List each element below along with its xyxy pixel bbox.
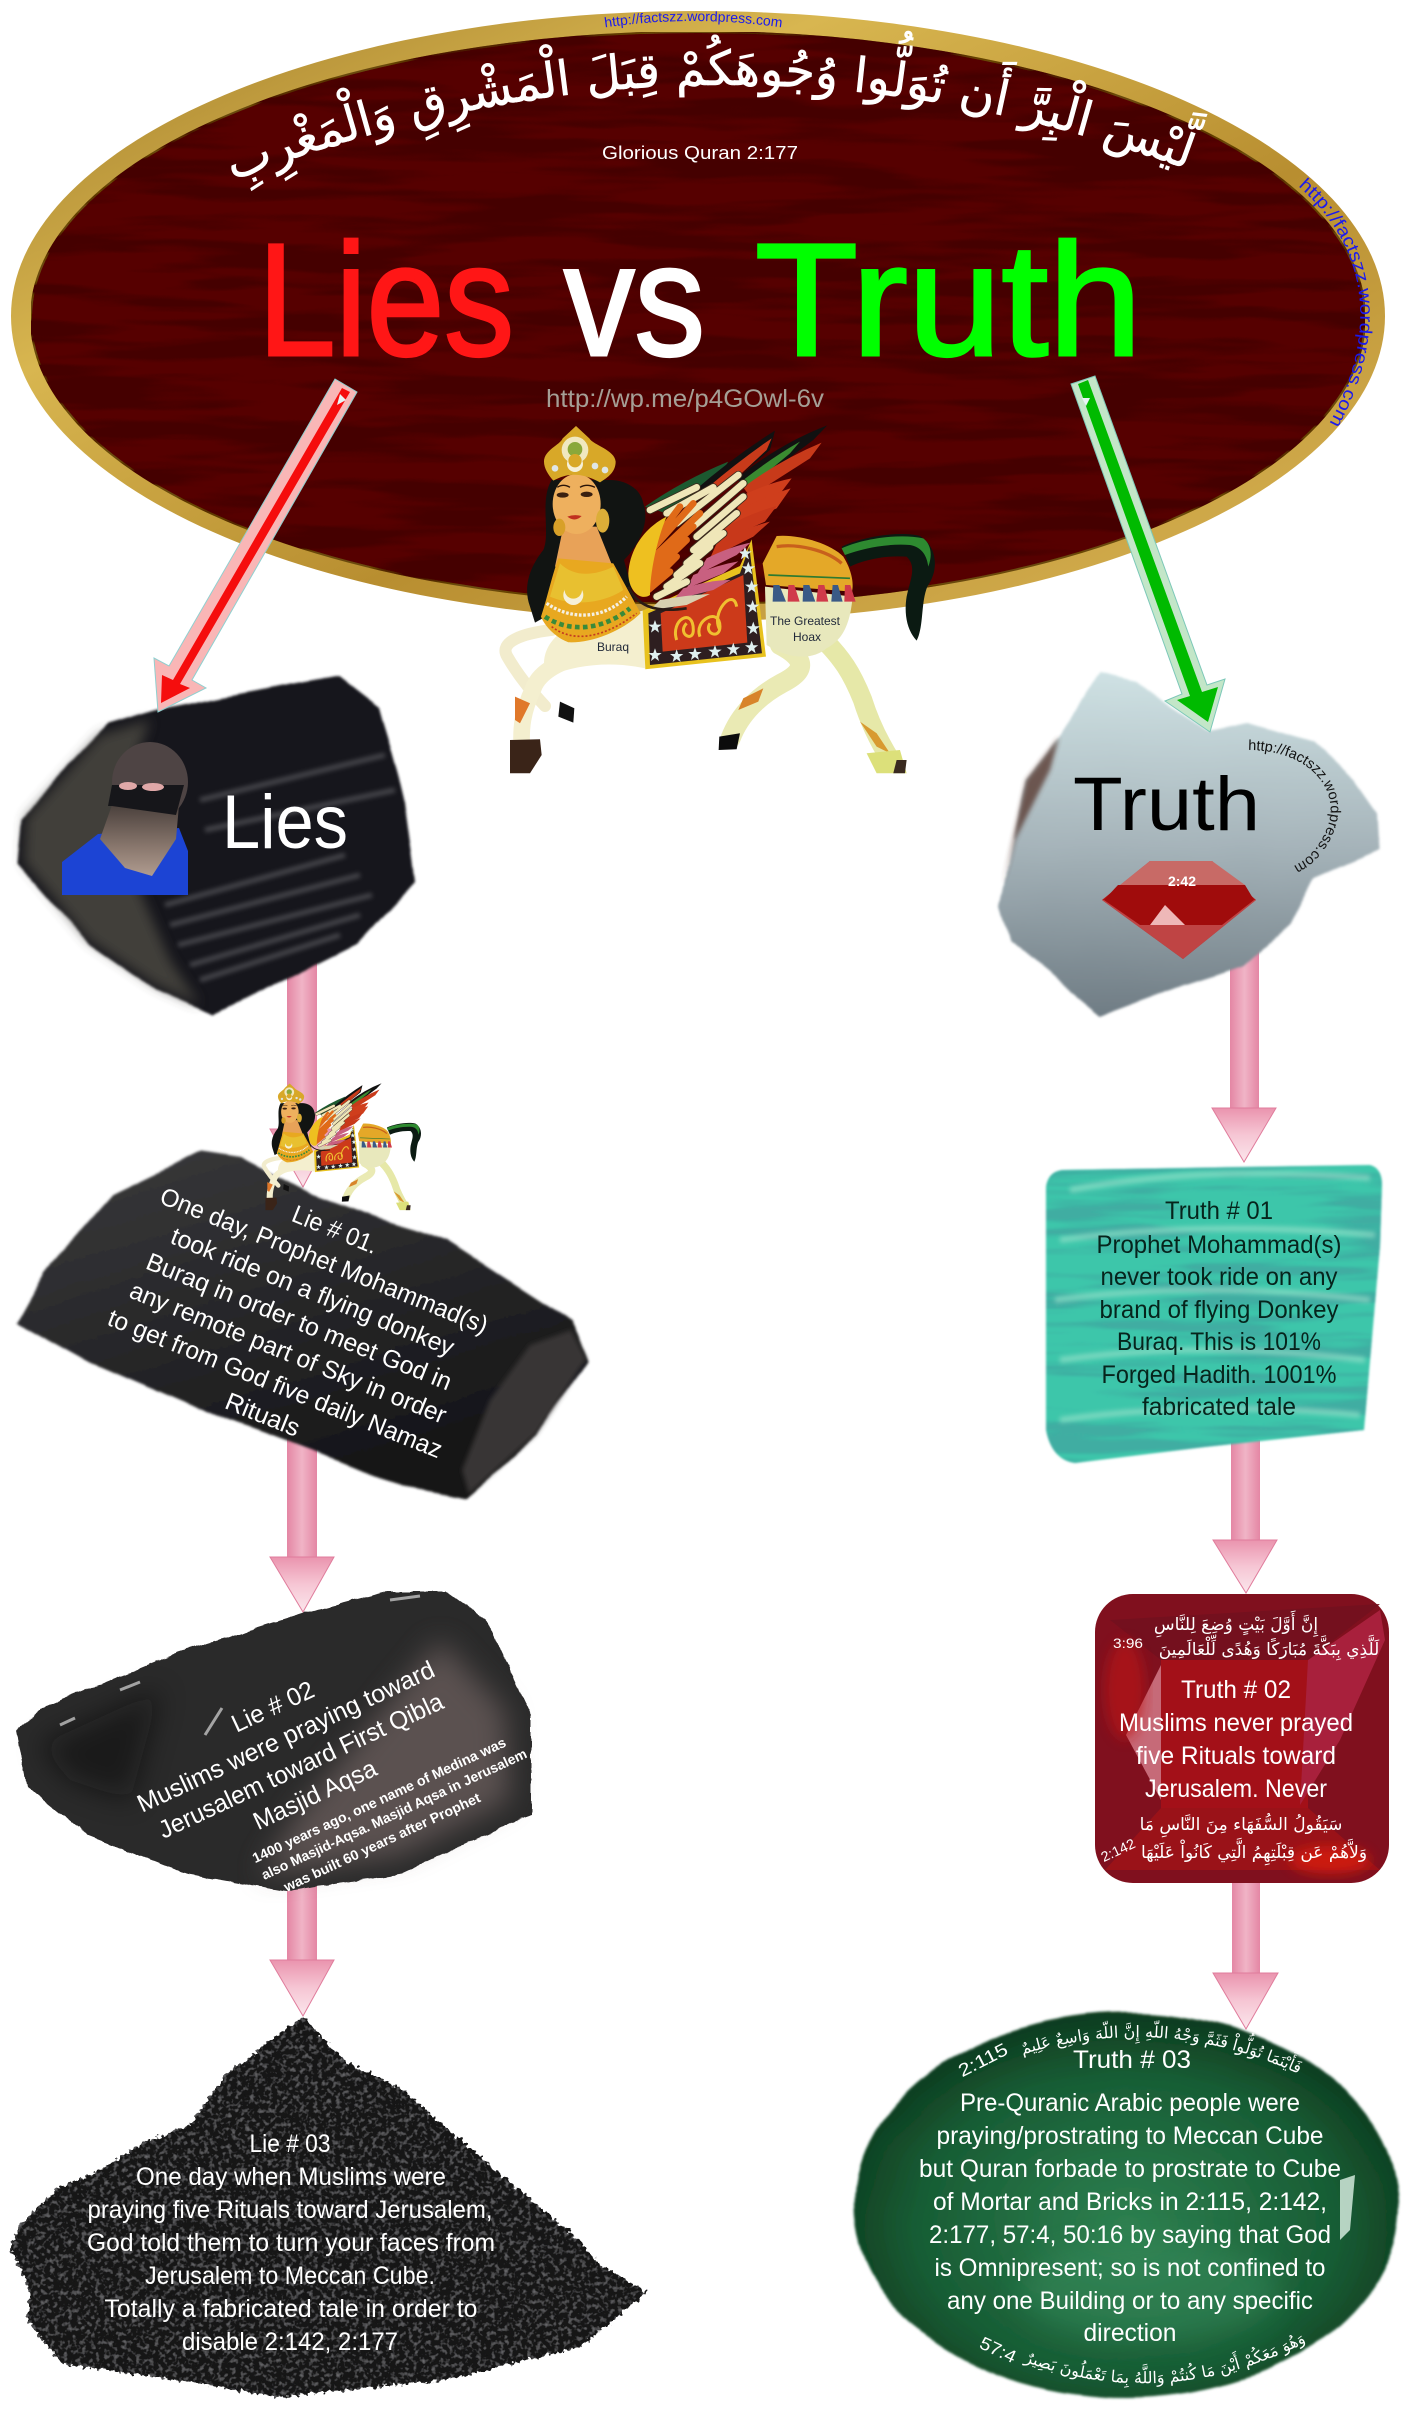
text: lie 01: Buraq in order to meet God in [142, 1248, 456, 1396]
highlight on emerald [1340, 2175, 1355, 2240]
text: truth 01 [1096, 1197, 1342, 1421]
text: truth 03: praying/prostrating to Meccan Cube [936, 2122, 1324, 2150]
stone: pale grey agate [1000, 674, 1379, 1016]
text: truth 01: Buraq. This is 101% [1117, 1328, 1321, 1356]
text: Arabic 2:142: وَلاَّهُمْ عَن قِبْلَتِهِمُ الَّتِي كَانُواْ عَلَيْهَا [1141, 1837, 1367, 1866]
text: lie 03: disable 2:142, 2:177 [182, 2328, 398, 2356]
title: Truth: Truth [755, 210, 1142, 389]
text: truth 01: Truth # 01 [1165, 1197, 1273, 1225]
Arabic verse: لَّيْسَ الْبِرَّ أَن تُوَلُّوا وُجُوهَكُمْ قِبَلَ الْمَشْرِقِ وَالْمَغْرِبِ [231, 30, 1208, 192]
text: Arabic 2:142: سَيَقُولُ السُّفَهَاء مِنَ النَّاسِ مَا [1140, 1812, 1342, 1838]
stone: coal powder pile [10, 2017, 647, 2397]
text: lie 02: also Masjid-Aqsa. Masjid Aqsa in Jerusalem [259, 1745, 529, 1883]
text: truth 03: 2:177, 57:4, 50:16 by saying that God [929, 2221, 1331, 2249]
icon: ruby gem: 2:42 [1168, 873, 1196, 889]
panel: Truth 03 [852, 2009, 1401, 2400]
stone: black tourmaline [18, 676, 415, 1014]
text: truth 03: direction [1084, 2319, 1176, 2347]
icon: ruby gem [1102, 861, 1256, 959]
panel: Lie 01 [16, 1152, 588, 1497]
panel: title oval [11, 11, 1385, 620]
arrow: pink truth connector 2 [1213, 1440, 1277, 1593]
text: lie 03: Lie # 03 [250, 2130, 330, 2158]
text: truth 03: Truth # 03 [1073, 2046, 1191, 2074]
verse ref 57:4: 57:4 [977, 2333, 1019, 2367]
verse ref 2:115: 2:115 [955, 2039, 1011, 2081]
text: Arabic 2:142 [1098, 1812, 1367, 1866]
title: Lies: Lies [258, 210, 514, 389]
Arabic arc top: فَأَيْنَمَا تُوَلُّواْ فَثَمَّ وَجْهُ اللّهِ إِنَّ اللّهَ وَاسِعٌ عَلِيمٌ [1022, 2020, 1302, 2072]
text: lie 03: praying five Rituals toward Jerusalem, [88, 2196, 492, 2224]
text: truth 01: brand of flying Donkey [1100, 1296, 1339, 1324]
url curved top: http://factszz.wordpress.com [604, 11, 782, 28]
gold oval frame [11, 11, 1385, 621]
text: lie 03: One day when Muslims were [136, 2163, 446, 2191]
text: lie 03 [87, 2130, 495, 2356]
rough grey flank [24, 720, 200, 1005]
winged figure art [505, 425, 935, 773]
panel: Lie 02 [16, 1591, 531, 1895]
text: truth 02: five Rituals toward [1136, 1742, 1336, 1770]
text: truth 03: but Quran forbade to prostrate to Cube [919, 2155, 1341, 2183]
text: lie 03: Totally a fabricated tale in order to [104, 2295, 478, 2323]
text: lie 02 [133, 1656, 529, 1895]
mottled light patch [1020, 2240, 1280, 2340]
stone: obsidian shard [16, 1591, 531, 1891]
arrow: pink lies connector 3 [270, 1860, 334, 2016]
text: truth 02 [1119, 1676, 1353, 1803]
crystal streaks [165, 755, 395, 980]
label: Buraq: Buraq [597, 640, 629, 654]
text: lie 01: Rituals [221, 1387, 304, 1443]
verse reference: Glorious Quran 2:177 [602, 143, 798, 163]
text: truth 03: is Omnipresent; so is not confined to [934, 2254, 1326, 2282]
text: truth 01: Forged Hadith. 1001% [1102, 1361, 1336, 1389]
text: Arabic 3:96: 3:96 [1113, 1635, 1143, 1651]
text: truth 02: Jerusalem. Never [1145, 1775, 1327, 1803]
text: truth 03 [919, 2046, 1341, 2347]
text: truth 01: Prophet Mohammad(s) [1096, 1231, 1342, 1259]
bright specks [60, 1596, 420, 1735]
arrow: pink truth connector 3 [1213, 1870, 1278, 2029]
amazonite pale streaks [1055, 1174, 1375, 1420]
label: The Greatest Hoax [770, 614, 841, 644]
arrow: red to Lies [154, 379, 357, 712]
text: truth 02: Truth # 02 [1181, 1676, 1291, 1704]
text: lie 02: Lie # 02 [227, 1676, 319, 1738]
short url: http://wp.me/p4GOwl-6v [546, 385, 825, 413]
text: lie 02: was built 60 years after Prophet [280, 1789, 483, 1895]
panel: Lie 03 [10, 2017, 647, 2397]
Arabic arc bottom: وَهُوَ مَعَكُمْ أَيْنَ مَا كُنتُمْ وَاللَّهُ بِمَا تَعْمَلُونَ بَصِيرٌ [1022, 2335, 1306, 2388]
heading: Lies: Lies [222, 780, 348, 865]
heading: Truth: Truth [1073, 762, 1260, 847]
text: truth 03: of Mortar and Bricks in 2:115, 2:142, [933, 2188, 1327, 2216]
text: Arabic 3:96: إِنَّ أَوَّلَ بَيْتٍ وُضِعَ لِلنَّاسِ [1154, 1610, 1318, 1638]
label: The Greatest Hoax: Hoax [793, 630, 821, 644]
icon: niqab girl [62, 742, 188, 895]
dark shadow band [40, 1690, 160, 1800]
text: lie 01: any remote part of Sky in order [126, 1277, 450, 1429]
text: lie 02: Jerusalem toward First Qibla [154, 1688, 448, 1844]
text: lie 03: God told them to turn your faces from [87, 2229, 495, 2257]
url curved right: http://factszz.wordpress.com [1299, 177, 1372, 426]
pinkish reflection [260, 1640, 510, 1875]
arrow: pink truth connector 1 [1212, 950, 1276, 1162]
panel: Truth 01 [1046, 1165, 1382, 1463]
text: lie 03: Jerusalem to Meccan Cube. [145, 2262, 435, 2290]
text: Arabic 2:142: 2:142 [1098, 1835, 1138, 1865]
arrow: green to Truth [1071, 376, 1225, 732]
text: truth 03: any one Building or to any specific [947, 2287, 1313, 2315]
stone end cap [462, 1330, 586, 1494]
text: lie 01: Lie # 01. [288, 1200, 382, 1260]
text: truth 03: Pre-Quranic Arabic people were [960, 2089, 1300, 2117]
illustration: Buraq large [505, 425, 935, 773]
text: lie 02: Muslims were praying toward [133, 1656, 439, 1818]
stone: cushion ruby [1095, 1594, 1389, 1883]
panel: Truth stone [996, 671, 1381, 1018]
arrow: pink lies connector 1 [270, 960, 334, 1187]
panel: Lies stone [18, 676, 415, 1014]
text: truth 01: never took ride on any [1100, 1263, 1338, 1291]
text: lie 02: Masjid Aqsa [249, 1754, 381, 1836]
title: vs: vs [564, 210, 705, 389]
text: lie 01 [104, 1182, 492, 1464]
stone: emerald cabochon [855, 2012, 1399, 2398]
panel: Truth 02 [1095, 1594, 1389, 1883]
stone: amazonite block [1046, 1165, 1382, 1463]
text: lie 01: to get from God five daily Namaz [104, 1304, 446, 1464]
arrow: pink lies connector 2 [270, 1400, 334, 1612]
text: truth 01: fabricated tale [1142, 1393, 1296, 1421]
text: Arabic 3:96 [1113, 1610, 1380, 1661]
text: truth 02: Muslims never prayed [1119, 1709, 1353, 1737]
dark red wood oval [31, 32, 1365, 604]
text: lie 02: 1400 years ago, one name of Medina was [250, 1734, 509, 1866]
illustration: Buraq small [264, 1083, 421, 1210]
url curved around stone: http://factszz.wordpress.com [1249, 739, 1342, 872]
text: lie 01: took ride on a flying donkey [167, 1222, 459, 1362]
stone: black rod [16, 1152, 588, 1497]
text: lie 01: One day, Prophet Mohammad(s) [156, 1182, 492, 1340]
label: The Greatest Hoax: The Greatest [770, 614, 841, 628]
text: Arabic 3:96: لَلَّذِي بِبَكَّةَ مُبَارَكًا وَهُدًى لِّلْعَالَمِينَ [1159, 1633, 1380, 1661]
